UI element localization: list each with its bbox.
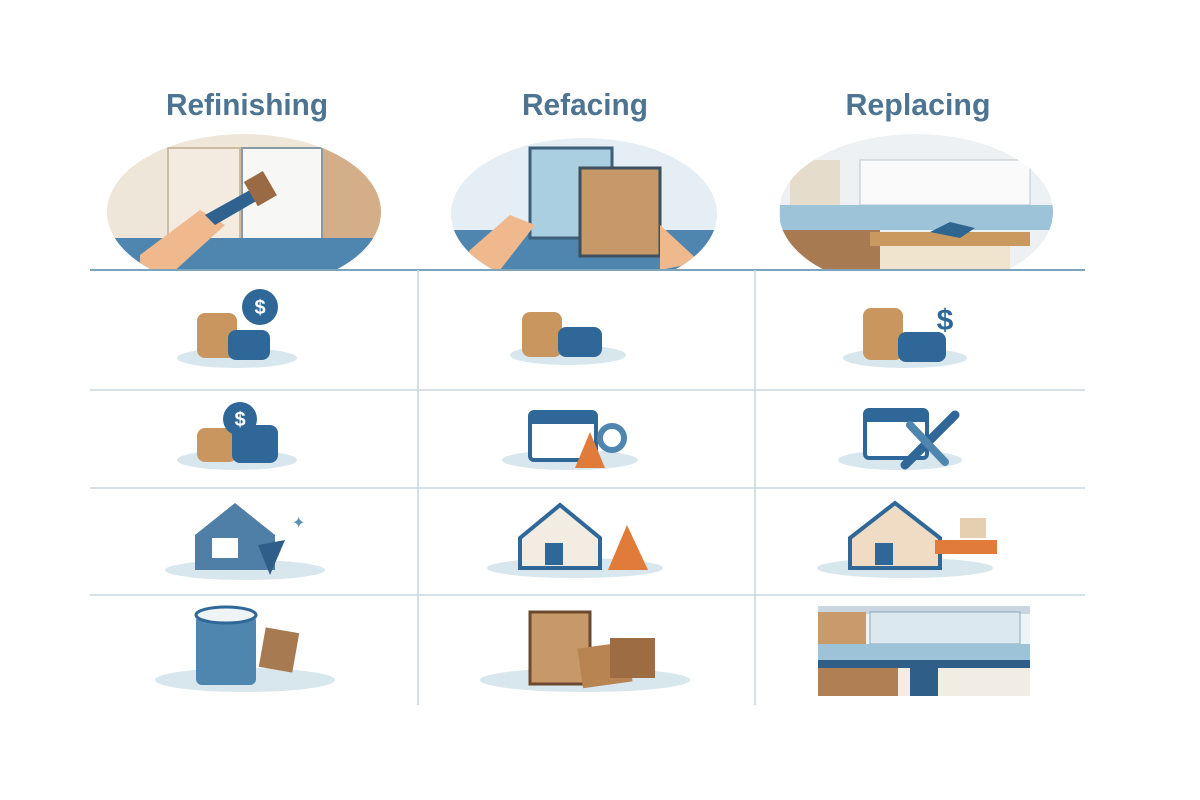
header image: replacing xyxy=(779,134,1053,269)
row2 icon: calendar cone gear xyxy=(502,412,638,470)
row2 icon: coins refinishing xyxy=(177,402,297,470)
title: Refacing: Refacing xyxy=(522,87,648,122)
row1 icon: coins refacing xyxy=(510,312,626,365)
row2 icon: calendar wrench xyxy=(838,410,962,470)
row1 icon: coins refinishing xyxy=(177,289,297,368)
row3 icon: house hammer xyxy=(165,503,325,580)
row3 icon: house hammer: ✦ xyxy=(292,515,305,532)
title: Replacing: Replacing xyxy=(846,87,990,122)
grid lines xyxy=(90,270,1085,705)
row1 icon: coins replacing xyxy=(843,304,967,368)
row4 icon: paint can brush xyxy=(155,607,335,692)
row4 icon: kitchen picture xyxy=(818,606,1030,696)
row4 icon: wood panels xyxy=(480,612,690,692)
row3 icon: house construction xyxy=(817,503,997,578)
row1 icon: coins replacing: $ xyxy=(937,304,954,337)
header image: refacing xyxy=(451,138,717,269)
row2 icon: coins refinishing: $ xyxy=(234,409,246,431)
row3 icon: house cone xyxy=(487,505,663,578)
title: Refinishing: Refinishing xyxy=(166,87,328,122)
header image: refinishing xyxy=(107,134,381,269)
row1 icon: coins refinishing: $ xyxy=(254,297,266,319)
